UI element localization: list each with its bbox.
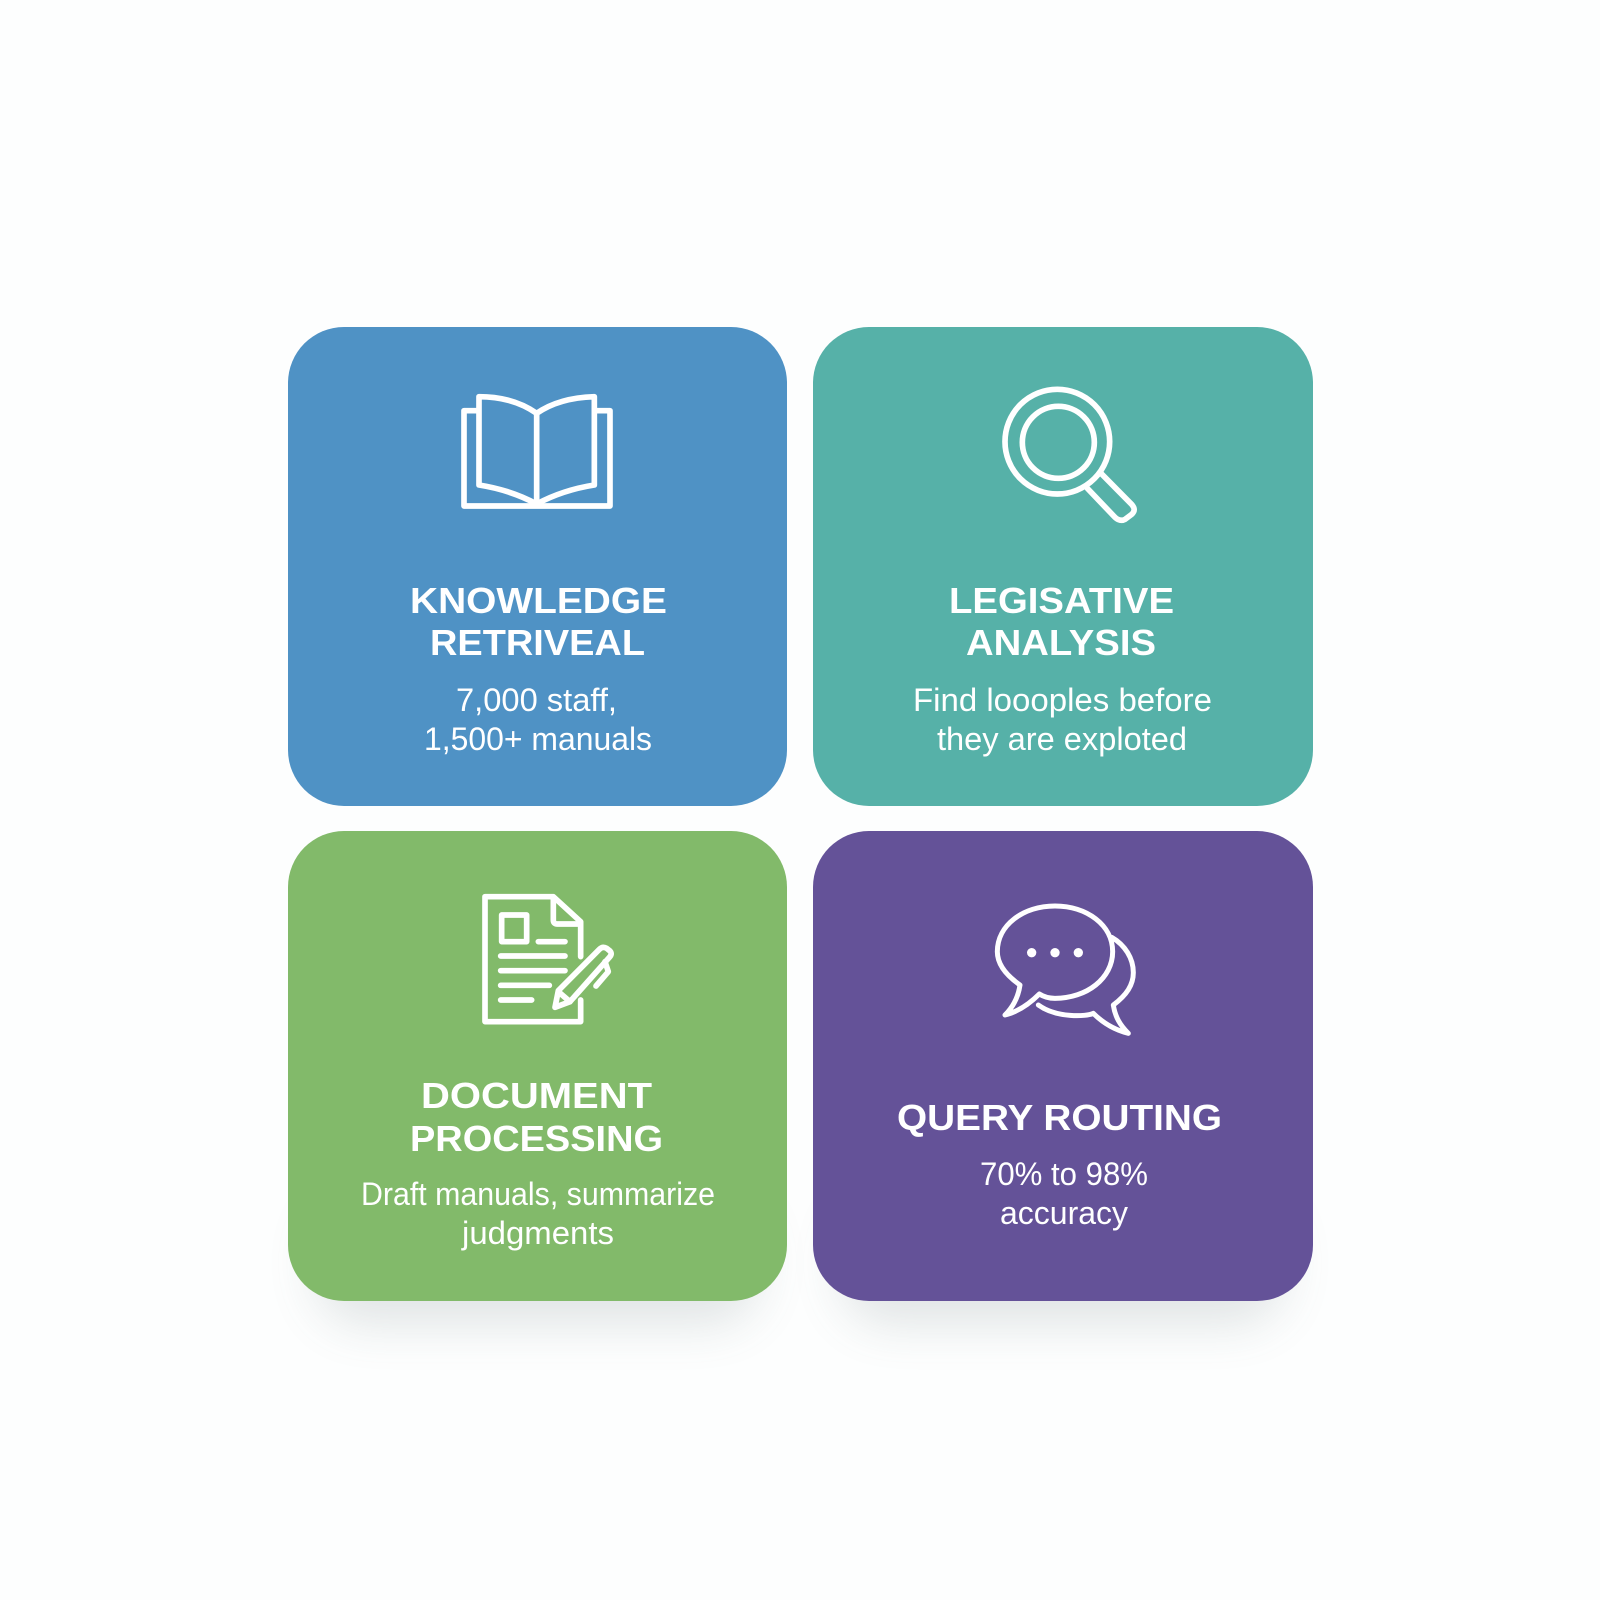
- description: Find loooples before: [913, 682, 1212, 718]
- card background: teal: [813, 327, 1313, 806]
- card background: blue: [288, 327, 787, 806]
- description: judgments: [461, 1215, 614, 1251]
- heading: QUERY ROUTING: [897, 1097, 1222, 1138]
- description: Draft manuals, summarize: [361, 1176, 715, 1212]
- description: 70% to 98%: [980, 1156, 1148, 1192]
- icon: chat bubbles: [997, 906, 1133, 1033]
- heading: DOCUMENT: [421, 1075, 652, 1116]
- card shadow: [315, 1200, 760, 1325]
- description: [361, 1176, 715, 1251]
- description: [424, 682, 652, 757]
- card background: purple: [813, 831, 1313, 1301]
- panel: query routing: [813, 831, 1313, 1325]
- panel: knowledge retrieval: [288, 327, 787, 806]
- description: [980, 1156, 1148, 1231]
- heading: ANALYSIS: [966, 622, 1156, 663]
- icon: magnifying glass: [1005, 389, 1134, 520]
- description: they are exploted: [937, 721, 1187, 757]
- panel: legislative analysis: [813, 327, 1313, 806]
- panel: document processing: [288, 831, 787, 1325]
- description: [913, 682, 1212, 757]
- card background: green: [288, 831, 787, 1301]
- description: accuracy: [1000, 1195, 1128, 1231]
- heading: [949, 580, 1174, 663]
- card shadow: [840, 1200, 1285, 1325]
- description: 1,500+ manuals: [424, 721, 652, 757]
- heading: [410, 1075, 663, 1159]
- heading: PROCESSING: [410, 1118, 663, 1159]
- heading: RETRIVEAL: [430, 622, 645, 663]
- heading: KNOWLEDGE: [410, 580, 667, 621]
- description: 7,000 staff,: [456, 682, 617, 718]
- heading: [410, 580, 667, 663]
- icon: open book: [464, 397, 610, 506]
- heading: LEGISATIVE: [949, 580, 1174, 621]
- icon: document with pen: [485, 897, 611, 1022]
